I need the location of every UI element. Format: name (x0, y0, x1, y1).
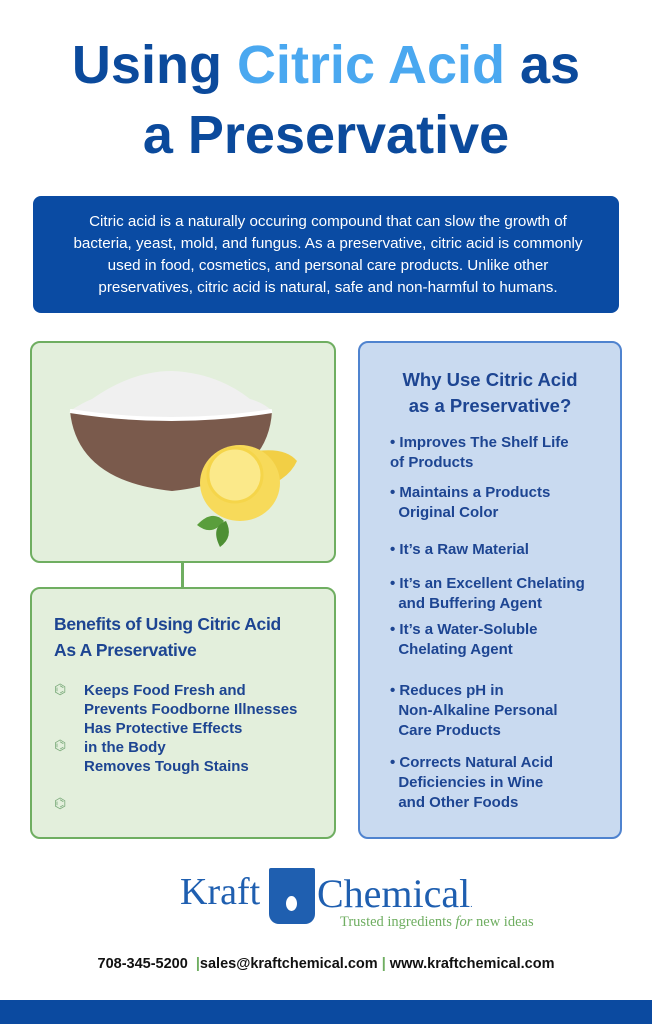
icon: molecule 2: ⌬ (54, 737, 66, 753)
list: reasons (390, 434, 585, 811)
panel: why use (358, 341, 622, 839)
panel: why use: and Buffering Agent (398, 595, 542, 612)
panel: why use: and Other Foods (398, 794, 518, 811)
panel: benefits (30, 587, 336, 839)
logo (180, 868, 534, 930)
benefits list: Removes Tough Stains (84, 758, 249, 775)
benefits list: Keeps Food Fresh and (84, 682, 246, 699)
contact line: 708-345-5200 |sales@kraftchemical.com | www.kraftchemical.com (98, 956, 554, 972)
panel: why use: Care Products (398, 722, 501, 739)
panel: image (30, 341, 336, 563)
logo: Chemical. (317, 871, 473, 916)
icon: molecule 3: ⌬ (54, 795, 66, 811)
panel: why use: • It’s a Water-Soluble (390, 621, 538, 638)
benefits list (84, 682, 297, 775)
title: a Preservative (143, 105, 509, 165)
heading: benefits: As A Preservative (54, 640, 196, 660)
title: Using Citric Acid as (72, 35, 580, 95)
icon: molecule 1: ⌬ (54, 681, 66, 697)
footer bar (0, 1000, 652, 1024)
title (72, 35, 580, 165)
intro text box (33, 196, 619, 313)
intro text box: Citric acid is a naturally occuring compound that can slow the growth of bacteria, yeast, mold, and fungus. As a preservative, citric acid is commonly used in food, cosmetics, and personal care products. Unlike other preservatives, citric acid is natural, safe and non-harmful to humans. (73, 213, 582, 296)
panel: why use: • Corrects Natural Acid (390, 754, 553, 771)
heading: why use: Why Use Citric Acid (402, 369, 578, 390)
logo: Trusted ingredients for new ideas (340, 914, 534, 930)
heading: benefits (54, 614, 281, 660)
panel: why use: Non-Alkaline Personal (398, 702, 558, 719)
logo: Kraft (180, 871, 260, 913)
panel: why use: • Maintains a Products (390, 484, 550, 501)
panel: why use: Chelating Agent (398, 641, 513, 658)
heading: why use: as a Preservative? (409, 395, 571, 416)
panel: why use: • Improves The Shelf Life (390, 434, 569, 451)
panel: why use: • It’s an Excellent Chelating (390, 575, 585, 592)
icon: logo mark (269, 868, 315, 924)
panel: why use: • It’s a Raw Material (390, 541, 529, 558)
connector line (181, 563, 184, 587)
benefits list: Prevents Foodborne Illnesses (84, 701, 297, 718)
heading: benefits: Benefits of Using Citric Acid (54, 614, 281, 634)
panel: why use: of Products (390, 454, 473, 471)
panel: why use: Original Color (398, 504, 498, 521)
icon: bowl with citric acid and lemon (70, 371, 297, 547)
panel: why use: • Reduces pH in (390, 682, 504, 699)
benefits list: in the Body (84, 739, 166, 756)
heading: why use (402, 369, 578, 416)
benefits list: Has Protective Effects (84, 720, 242, 737)
panel: why use: Deficiencies in Wine (398, 774, 543, 791)
